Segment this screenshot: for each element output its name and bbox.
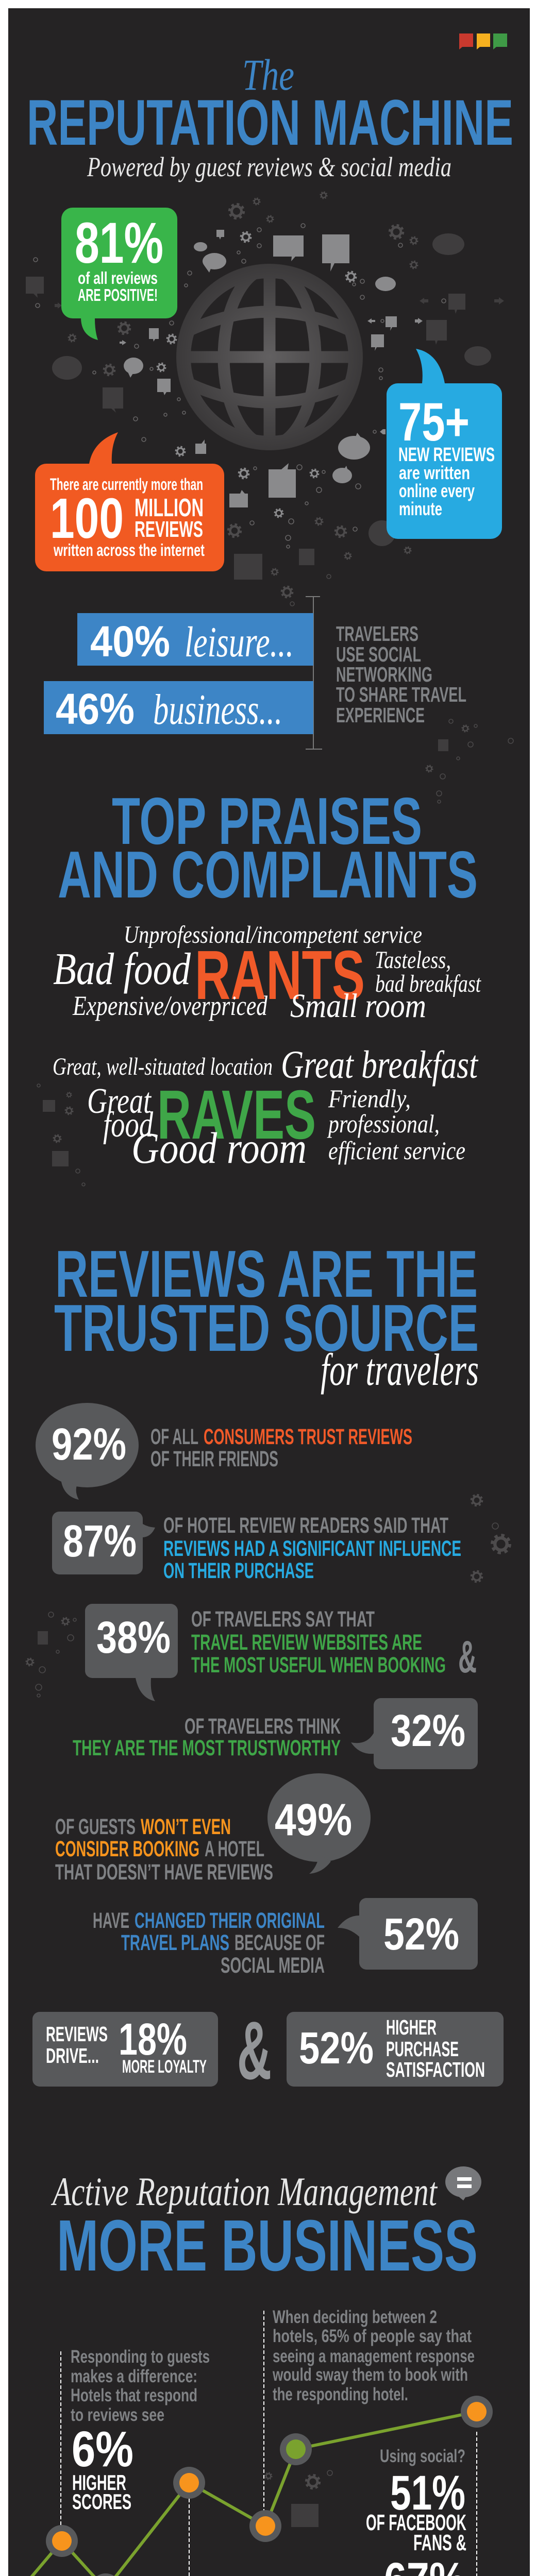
word cloud: rants: Expensive/overpriced	[72, 990, 268, 1021]
stat: 49%: 49%	[275, 1795, 352, 1845]
title: The	[242, 50, 294, 99]
stat box: 18% more loyalty: DRIVE...	[46, 2044, 99, 2067]
word cloud: raves: Friendly,	[328, 1084, 411, 1113]
text: using social: 51%	[390, 2466, 465, 2520]
callout: 81% positive reviews: 81%	[75, 211, 163, 275]
stat: 38%: OF TRAVELERS SAY THAT	[191, 1607, 375, 1632]
word cloud: raves: efficient service	[328, 1136, 465, 1165]
word cloud: raves: Good room	[131, 1123, 307, 1173]
stat: 87%: ON THEIR PURCHASE	[163, 1558, 314, 1583]
stat box: 18% more loyalty	[32, 2012, 218, 2087]
text: responding to guests: 6%	[72, 2421, 133, 2477]
stat box: 18% more loyalty: REVIEWS	[46, 2022, 108, 2046]
bar chart: travelers use social networking: TRAVELERS	[336, 622, 418, 646]
callout: 81% positive reviews: of all reviews	[78, 268, 158, 287]
callout: 81% positive reviews: ARE POSITIVE!	[78, 285, 158, 304]
text: responding to guests: HIGHER	[72, 2470, 126, 2495]
word cloud: rants	[53, 921, 481, 1025]
stat box: 52% higher purchase satisfaction: 52%	[299, 2023, 374, 2073]
heading: reviews are the trusted source	[54, 1237, 479, 1395]
text: responding to guests: Hotels that respond	[71, 2385, 197, 2405]
callout: 100 million reviews	[35, 432, 224, 571]
title	[27, 50, 513, 182]
bar chart: travelers use social networking	[44, 597, 466, 749]
word cloud: rants: Small room	[290, 987, 426, 1025]
text: using social	[366, 2446, 466, 2576]
callout: 81% positive reviews	[61, 208, 177, 340]
bar chart: travelers use social networking: 46%	[56, 685, 135, 733]
stat: 92%	[36, 1403, 412, 1500]
stat: 32%: THEY ARE THE MOST TRUSTWORTHY	[73, 1736, 341, 1760]
stat: 38%: TRAVEL REVIEW WEBSITES ARE	[191, 1630, 422, 1655]
stat: 49%: THAT DOESN’T HAVE REVIEWS	[55, 1860, 273, 1885]
bar chart: travelers use social networking: TO SHARE TRAVEL	[336, 683, 466, 706]
stat: 87%: 87%	[63, 1516, 137, 1566]
bar chart: travelers use social networking: 40%	[90, 617, 170, 666]
callout: 75+ new reviews: minute	[399, 498, 442, 519]
text: when deciding between 2 hotels: hotels, 65% of people say that	[273, 2326, 472, 2346]
stat box: 52% higher purchase satisfaction: PURCHASE	[386, 2037, 459, 2061]
text: when deciding between 2 hotels: When deciding between 2	[273, 2307, 437, 2327]
callout: 100 million reviews: written across the internet	[53, 540, 205, 560]
text: responding to guests: SCORES	[72, 2489, 131, 2514]
stat: 32%: 32%	[391, 1706, 465, 1756]
text: responding to guests: Responding to guests	[71, 2347, 210, 2367]
word cloud: raves: RAVES	[157, 1076, 316, 1154]
stat: 52% travel plans: SOCIAL MEDIA	[221, 1953, 325, 1978]
word cloud: raves	[53, 1043, 479, 1173]
stat: 52% travel plans: CHANGED THEIR ORIGINAL	[135, 1908, 325, 1933]
stat: 92%: 92%	[52, 1419, 126, 1469]
stat box: 52% higher purchase satisfaction	[287, 2012, 504, 2087]
stat: 92%: OF ALL	[150, 1425, 198, 1449]
text: responding to guests: to reviews see	[71, 2405, 164, 2425]
icon: logo speech squares	[459, 33, 507, 49]
callout: 100 million reviews: There are currently more than	[50, 475, 203, 494]
stat: 52% travel plans: 52%	[383, 1909, 459, 1959]
stat box: 52% higher purchase satisfaction: HIGHER	[386, 2015, 437, 2039]
text: responding to guests: makes a difference:	[71, 2366, 197, 2386]
text: responding to guests	[71, 2347, 210, 2514]
word cloud: raves: Great	[87, 1081, 152, 1121]
callout: 100 million reviews: 100	[50, 487, 124, 550]
callout: 75+ new reviews: NEW REVIEWS	[398, 444, 495, 466]
callout: 100 million reviews: MILLION	[135, 494, 204, 522]
stat: 92%: CONSUMERS TRUST REVIEWS	[204, 1425, 412, 1449]
ampersand: &	[237, 2004, 272, 2096]
stat: 49%	[55, 1773, 371, 1885]
bar chart: travelers use social networking: EXPERIENCE	[336, 703, 425, 727]
word cloud: rants: Tasteless,	[375, 946, 451, 974]
word cloud: raves: professional,	[327, 1109, 440, 1138]
stat: 49%: OF GUESTS	[55, 1815, 136, 1839]
text: when deciding between 2 hotels: the responding hotel.	[273, 2384, 408, 2404]
stat box: 18% more loyalty: MORE LOYALTY	[122, 2057, 207, 2077]
word cloud: raves: Great breakfast	[281, 1043, 479, 1087]
word cloud: rants: Unprofessional/incompetent service	[124, 921, 422, 948]
bar chart: travelers use social networking: NETWORKING	[336, 663, 432, 686]
stat: 52% travel plans	[93, 1898, 478, 1978]
stat: 52% travel plans: TRAVEL PLANS	[121, 1930, 229, 1955]
icon: globe	[175, 264, 364, 450]
callout: 75+ new reviews	[387, 349, 502, 539]
text: using social: FANS &	[413, 2530, 466, 2555]
stat: 38%: &	[458, 1631, 477, 1682]
stat: 32%: OF TRAVELERS THINK	[185, 1714, 341, 1739]
text: when deciding between 2 hotels: would sway them to book with	[272, 2365, 468, 2385]
word cloud: raves: Great, well-situated location	[53, 1053, 273, 1080]
stat: 38%: 38%	[96, 1613, 171, 1663]
stat box: 52% higher purchase satisfaction: SATISFACTION	[386, 2058, 485, 2081]
bar chart: travelers use social networking: business...	[153, 686, 282, 734]
stat: 49%: CONSIDER BOOKING	[55, 1837, 199, 1861]
text: when deciding between 2 hotels	[272, 2307, 475, 2404]
callout: 100 million reviews: REVIEWS	[135, 517, 203, 542]
word cloud: rants: Bad food	[53, 944, 191, 994]
stat: 92%: OF THEIR FRIENDS	[150, 1447, 278, 1471]
word cloud: raves: food	[103, 1105, 154, 1145]
stat box: 18% more loyalty: 18%	[119, 2014, 187, 2064]
line chart: growth upper	[8, 2311, 493, 2576]
stat: 49%: A HOTEL	[205, 1837, 264, 1861]
callout: 75+ new reviews: online every	[399, 480, 475, 501]
stat: 49%: WON’T EVEN	[141, 1815, 231, 1839]
stat: 38%	[85, 1604, 477, 1701]
stat: 32%	[73, 1698, 478, 1769]
word cloud: rants: RANTS	[195, 936, 365, 1014]
heading: active reputation management = more business	[51, 2166, 481, 2286]
stat: 52% travel plans: HAVE	[93, 1908, 129, 1933]
text: using social: Using social?	[380, 2446, 465, 2466]
callout: 75+ new reviews: are written	[399, 462, 470, 483]
text: using social: OF FACEBOOK	[366, 2510, 466, 2535]
stat: 52% travel plans: BECAUSE OF	[234, 1930, 325, 1955]
stat: 87%	[52, 1512, 461, 1583]
heading: top praises and complaints	[58, 784, 478, 912]
bar chart: travelers use social networking: USE SOCIAL	[336, 642, 421, 666]
callout: 75+ new reviews: 75+	[398, 392, 470, 452]
word cloud: rants: bad breakfast	[375, 970, 481, 997]
bar chart: travelers use social networking: leisure...	[185, 618, 294, 666]
